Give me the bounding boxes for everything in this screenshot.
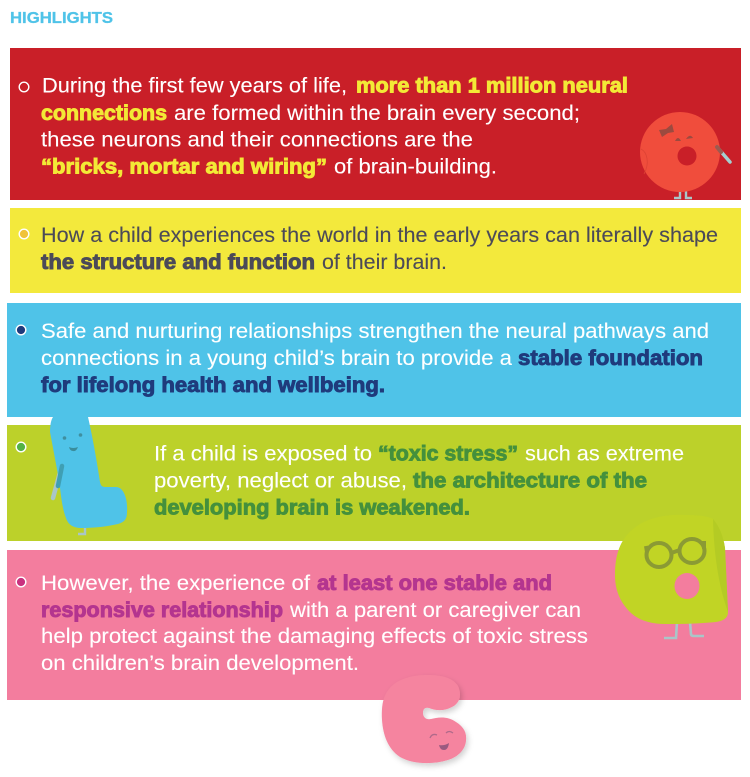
title: HIGHLIGHTS [10, 10, 113, 27]
panel: protective relationship: help protect against the damaging effects of toxic stress [41, 624, 588, 648]
panel: toxic stress: the architecture of the [413, 470, 647, 492]
panel: neural connections: more than 1 million neural [356, 74, 628, 98]
icon: red round character [640, 112, 730, 198]
panel: neural connections: connections [41, 102, 167, 125]
panel: nurturing relationships: connections in a young child’s brain to provide a [41, 346, 512, 370]
panel: neural connections [10, 48, 741, 200]
panel: neural connections: are formed within the brain every second; [174, 101, 580, 125]
panel: early experience: How a child experiences the world in the early years can literally shape [41, 223, 718, 247]
panel: protective relationship: However, the experience of [41, 571, 310, 595]
panel: protective relationship [7, 550, 741, 700]
icon: blue L character [50, 417, 127, 534]
icon: green glasses character [615, 515, 728, 638]
panel: nurturing relationships: Safe and nurturing relationships strengthen the neural pathways and [41, 319, 709, 343]
panel: early experience: the structure and function [41, 251, 315, 274]
panel: toxic stress: “toxic stress” [378, 442, 518, 466]
panel: protective relationship: on children’s brain development. [41, 651, 359, 675]
icon: pink C character [382, 675, 466, 763]
panel: neural connections: of brain-building. [334, 154, 497, 178]
panel: toxic stress: If a child is exposed to [154, 442, 372, 466]
panel: toxic stress: poverty, neglect or abuse, [154, 468, 407, 492]
panel: neural connections: these neurons and their connections are the [41, 128, 473, 152]
panel: early experience [10, 208, 741, 293]
panel: neural connections: “bricks, mortar and wiring” [41, 156, 327, 178]
panel: toxic stress: developing brain is weakened. [154, 496, 470, 520]
panel: toxic stress [7, 425, 741, 541]
panel: nurturing relationships: stable foundation [518, 347, 703, 370]
panel: early experience: of their brain. [322, 250, 447, 274]
panel: toxic stress: such as extreme [525, 442, 684, 466]
panel: protective relationship: with a parent or caregiver can [289, 598, 581, 622]
panel: protective relationship: at least one stable and [317, 572, 552, 595]
panel: neural connections: During the first few years of life, [42, 74, 347, 98]
panel: nurturing relationships: for lifelong health and wellbeing. [41, 374, 385, 397]
panel: nurturing relationships [7, 303, 741, 417]
panel: protective relationship: responsive relationship [41, 599, 283, 622]
